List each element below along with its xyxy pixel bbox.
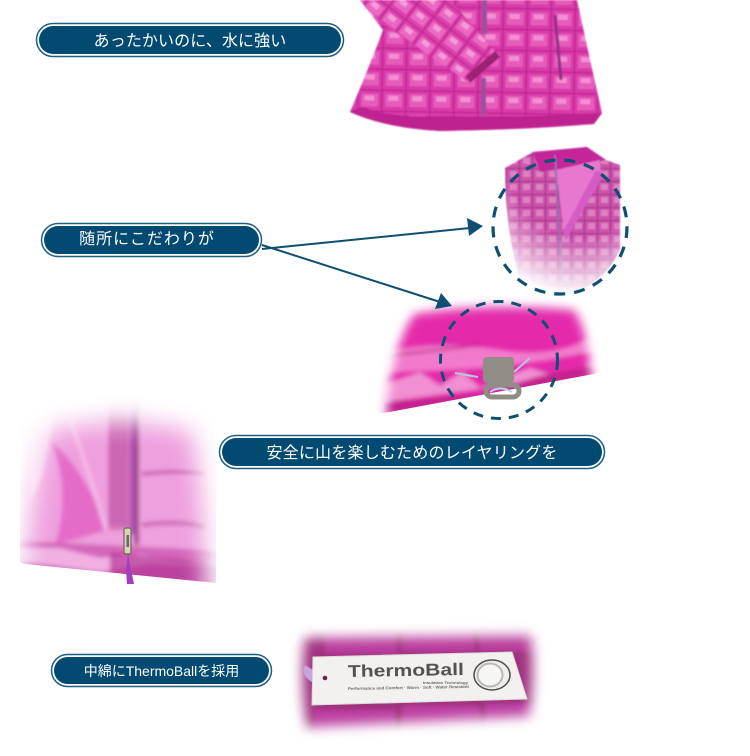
photo: front zipper bbox=[20, 404, 216, 583]
icon: zipper pull bbox=[124, 528, 134, 584]
heading pill: attention to detail bbox=[42, 224, 262, 256]
heading pill: ThermoBall insulation bbox=[52, 654, 272, 686]
arrow: to cord lock bbox=[262, 245, 452, 309]
tag card: Insulation Technology bbox=[423, 680, 469, 685]
photo: ThermoBall tag bbox=[292, 626, 542, 736]
photo: jacket hem bbox=[350, 0, 602, 131]
dashed circle: cord lock detail bbox=[440, 302, 558, 418]
arrow: to collar bbox=[262, 218, 483, 249]
heading pill: attention to detail: 随所にこだわりが bbox=[79, 230, 215, 248]
heading pill: warm yet water-resistant bbox=[36, 24, 344, 56]
dashed circle: collar detail bbox=[493, 160, 627, 294]
heading pill: layering for safe mountain fun bbox=[220, 436, 604, 468]
icon: cord lock bbox=[455, 357, 530, 397]
tag card: Performance and Comfort · Warm · Soft · Water Resistant bbox=[348, 684, 470, 691]
photo: open collar vest bbox=[505, 147, 620, 295]
tag card: ThermoBall bbox=[348, 660, 464, 681]
photo: hem drawcord bbox=[378, 298, 600, 414]
heading pill: warm yet water-resistant: あったかいのに、水に強い bbox=[94, 32, 286, 50]
heading pill: ThermoBall insulation: 中綿にThermoBallを採用 bbox=[84, 663, 239, 679]
heading pill: layering for safe mountain fun: 安全に山を楽しむためのレイヤリングを bbox=[266, 444, 558, 462]
tag card bbox=[312, 652, 527, 705]
